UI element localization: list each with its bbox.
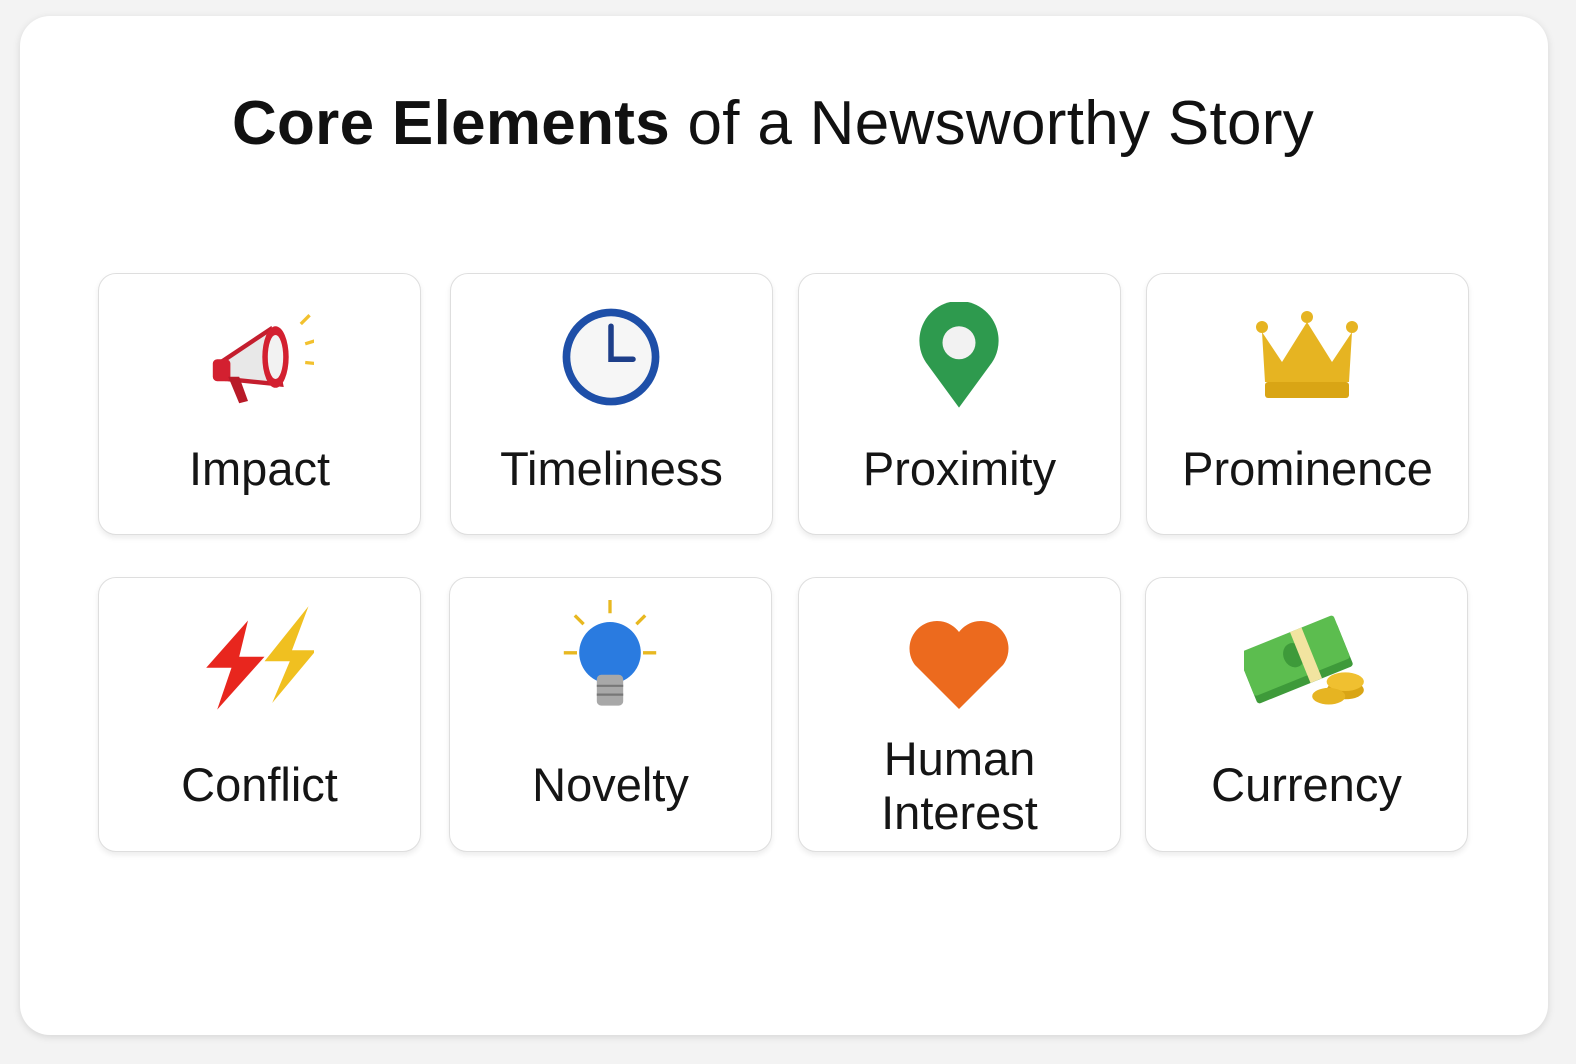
icon: map pin <box>919 302 999 408</box>
label: Currency <box>1211 758 1402 811</box>
label: Impact <box>189 442 330 495</box>
label: Prominence <box>1182 442 1433 495</box>
icon: megaphone <box>212 314 314 404</box>
icon: light bulb <box>564 600 656 706</box>
label <box>881 732 1038 839</box>
card: Prominence <box>1146 273 1469 535</box>
card: Conflict <box>98 577 421 852</box>
label: Timeliness <box>500 442 723 495</box>
label: Novelty <box>532 758 689 811</box>
label: Human <box>884 732 1035 785</box>
card: Timeliness <box>450 273 773 535</box>
icon: money <box>1244 616 1364 704</box>
title: Core Elements of a Newsworthy Story <box>232 89 1314 158</box>
card: Proximity <box>798 273 1121 535</box>
card: Currency <box>1145 577 1468 852</box>
icon: heart <box>910 621 1008 709</box>
icon: lightning bolts <box>206 606 314 710</box>
card: Impact <box>98 273 421 535</box>
icon: crown <box>1256 311 1358 398</box>
icon: clock <box>562 308 660 406</box>
card: Novelty <box>449 577 772 852</box>
label: Conflict <box>181 758 338 811</box>
label: Interest <box>881 786 1038 839</box>
card: Human Interest <box>798 577 1121 852</box>
label: Proximity <box>863 442 1056 495</box>
